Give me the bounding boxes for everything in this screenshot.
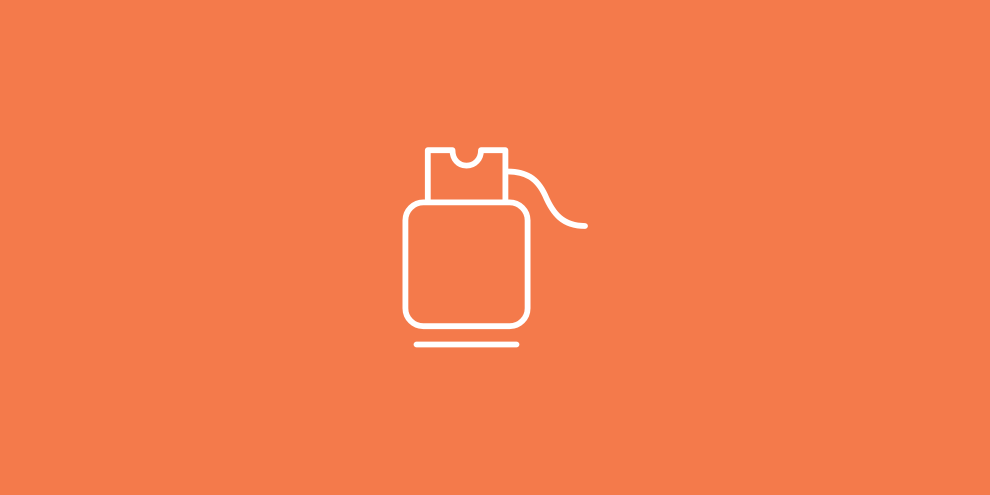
cylinder neck with notch [428, 150, 505, 201]
cylinder body [405, 202, 528, 326]
base line [416, 342, 516, 347]
hose [507, 172, 585, 226]
